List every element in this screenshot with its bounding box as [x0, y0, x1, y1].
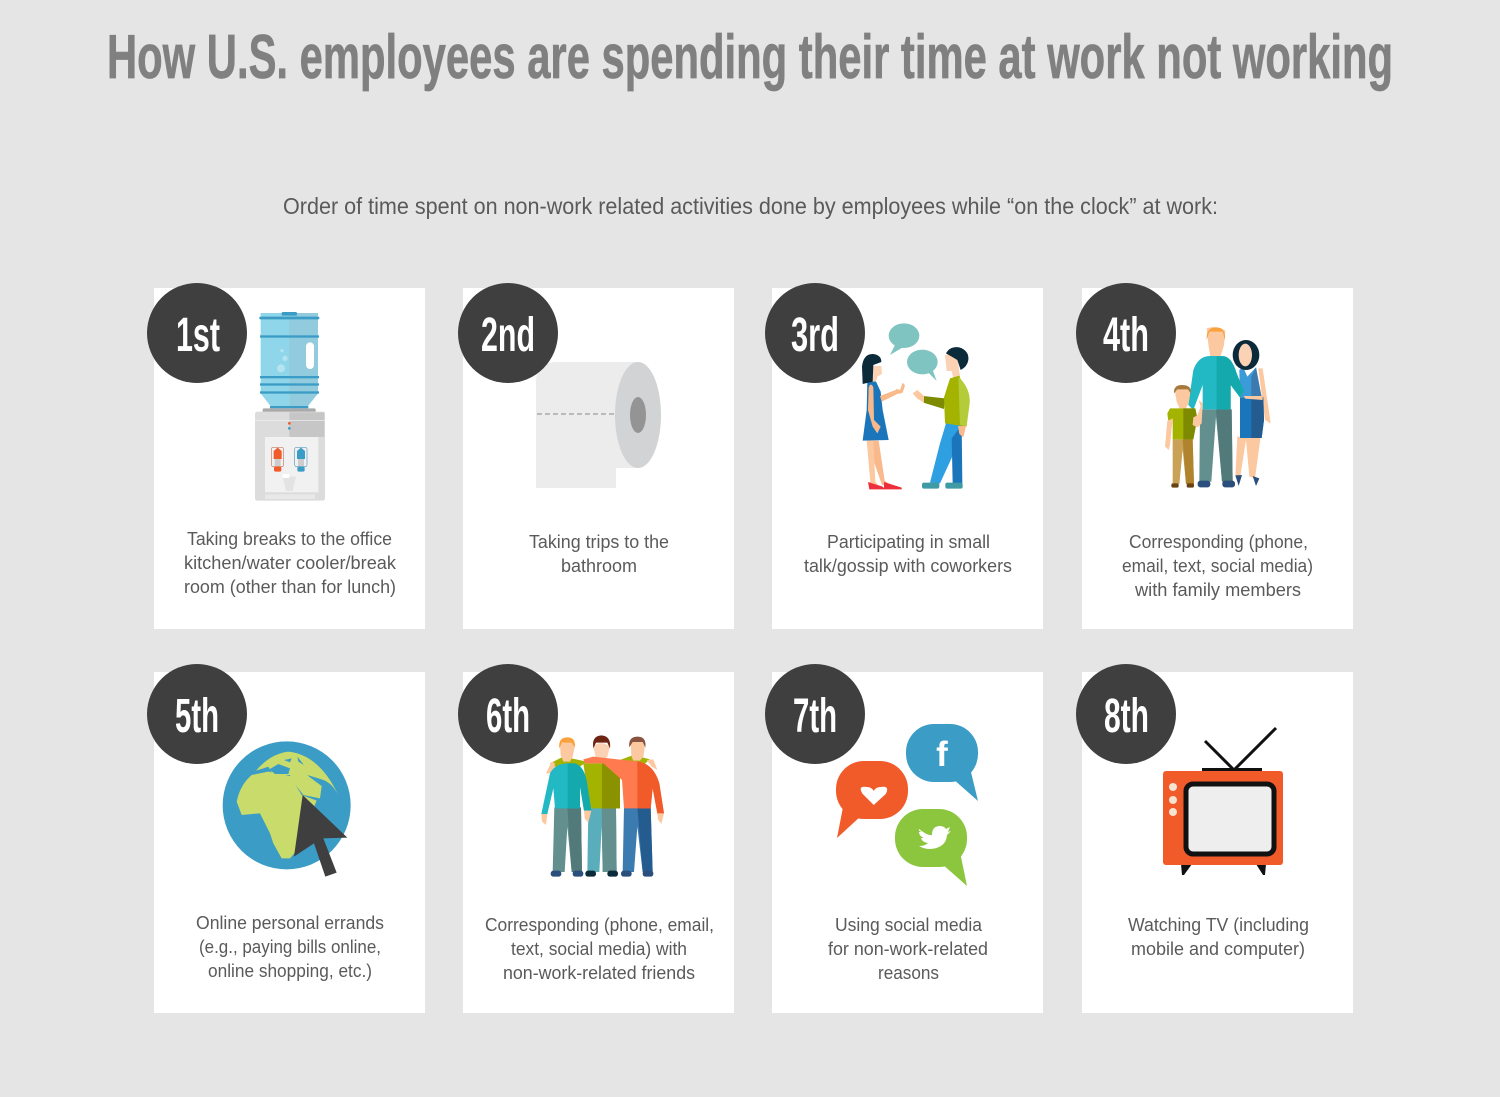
panel: 1st water cooler breaks [147, 283, 425, 629]
icon: three friends [541, 735, 664, 877]
panel: 7th social media [765, 664, 1043, 1013]
caption [1128, 915, 1309, 959]
caption [828, 915, 988, 983]
rank badge 3rd: 3rd [791, 309, 839, 362]
rank badge 6th: 6th [486, 690, 530, 743]
caption: talk/gossip with coworkers [804, 556, 1012, 576]
rank badge 1st [147, 283, 247, 383]
rank badge 7th: 7th [793, 690, 837, 743]
icon: two people talking [862, 323, 970, 489]
rank badge 3rd [765, 283, 865, 383]
caption: Taking breaks to the office [187, 529, 392, 549]
caption [196, 913, 384, 981]
rank badge 8th [1076, 664, 1176, 764]
caption: bathroom [561, 556, 637, 576]
rank badge 2nd [458, 283, 558, 383]
rank badge 5th [147, 664, 247, 764]
panel: 8th watching TV [1076, 664, 1353, 1013]
rank badge 5th: 5th [175, 690, 219, 743]
rank badge 4th [1076, 283, 1176, 383]
icon: social media speech bubbles: f [936, 735, 948, 774]
rank badge 4th: 4th [1103, 309, 1149, 362]
rank badge 6th [458, 664, 558, 764]
caption [804, 532, 1012, 576]
caption: text, social media) with [511, 939, 687, 959]
rank badge 7th [765, 664, 865, 764]
caption: Taking trips to the [529, 532, 669, 552]
rank badge 8th: 8th [1104, 690, 1149, 743]
icon: family [1165, 327, 1271, 488]
caption: Online personal errands [196, 913, 384, 933]
caption [529, 532, 669, 576]
caption: non-work-related friends [503, 963, 695, 983]
caption [184, 529, 397, 597]
caption: mobile and computer) [1131, 939, 1305, 959]
caption: kitchen/water cooler/break [184, 553, 397, 573]
caption: for non-work-related [828, 939, 988, 959]
panel: 4th family correspondence [1076, 283, 1353, 629]
caption: online shopping, etc.) [208, 961, 372, 981]
caption: (e.g., paying bills online, [199, 937, 381, 957]
caption: Corresponding (phone, [1129, 532, 1308, 552]
caption: room (other than for lunch) [184, 577, 396, 597]
icon: television [1163, 728, 1283, 875]
icon: globe with cursor [223, 741, 351, 877]
panel: 3rd small talk [765, 283, 1043, 629]
caption [1122, 532, 1313, 600]
rank badge 1st: 1st [176, 309, 220, 362]
caption [485, 915, 714, 983]
icon: water cooler [255, 312, 325, 501]
caption: Participating in small [827, 532, 990, 552]
icon: toilet paper roll [536, 362, 661, 488]
caption: reasons [878, 963, 939, 983]
caption: with family members [1134, 580, 1301, 600]
icon: social media speech bubbles [836, 724, 978, 886]
subtitle: Order of time spent on non-work related activities done by employees while “on the clock” at work: [283, 193, 1218, 219]
panel: 2nd bathroom trips [458, 283, 734, 629]
caption: email, text, social media) [1122, 556, 1313, 576]
caption: Corresponding (phone, email, [485, 915, 714, 935]
caption: Watching TV (including [1128, 915, 1309, 935]
panel: 6th friends correspondence [458, 664, 734, 1013]
rank badge 2nd: 2nd [481, 309, 535, 362]
caption: Using social media [835, 915, 983, 935]
panel: 5th online errands [147, 664, 425, 1013]
